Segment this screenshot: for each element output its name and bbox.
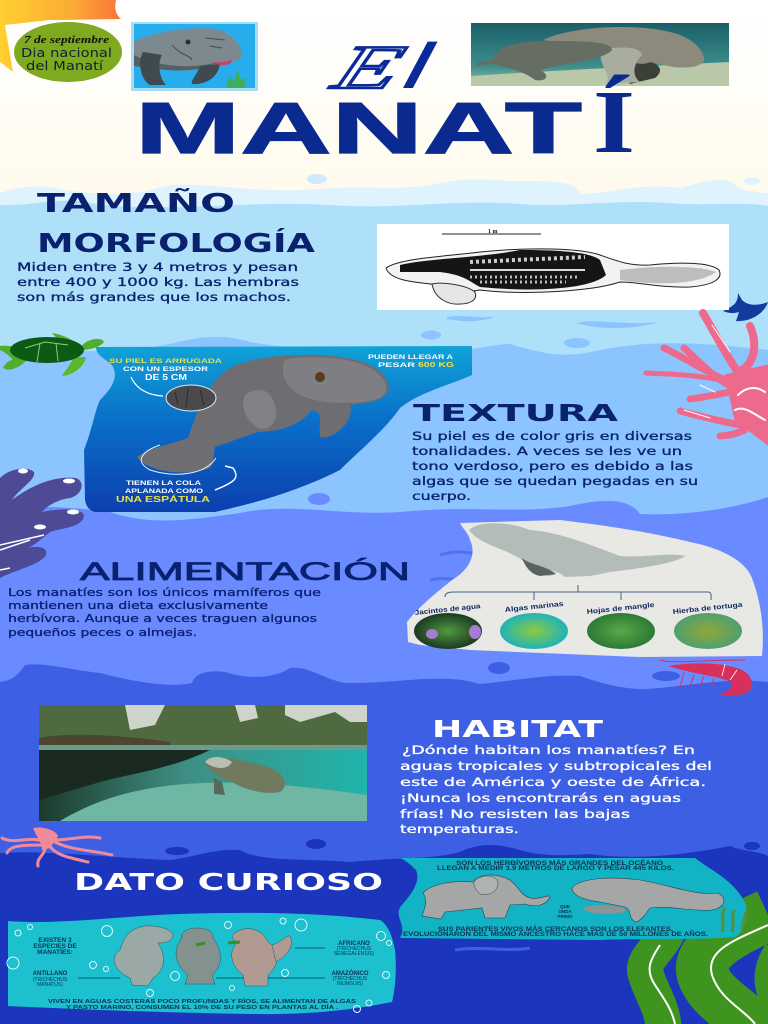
panel: largest herbivores: LLEGAN A MEDIR 3.9 METROS DE LARGO Y PESAR 445 KILOS. xyxy=(437,866,674,872)
panel: skin infographic: DE 5 CM xyxy=(145,373,187,382)
heading: alimentación: ALIMENTACIÓN xyxy=(80,557,410,586)
panel: diet plants: Hierba de tortuga xyxy=(672,602,743,616)
panel: three species: INUNGUIS) xyxy=(337,981,363,987)
text: habitat: aguas tropicales y subtropicales del xyxy=(400,759,712,773)
panel: largest herbivores xyxy=(399,858,747,940)
panel: skin infographic: 600 KG xyxy=(418,360,454,369)
title: El: E xyxy=(323,33,414,101)
text: size: Miden entre 3 y 4 metros y pesan xyxy=(17,260,298,274)
text: texture: tonalidades. A veces se les ve un xyxy=(412,444,682,458)
panel: largest herbivores: EVOLUCIONARON DEL MISMO ANCESTRO HACE MÁS DE 50 MILLONES DE AÑOS. xyxy=(403,931,708,938)
icon: whale xyxy=(723,293,768,321)
panel: diet plants: Jacintos de agua xyxy=(414,603,481,617)
heading: textura: TEXTURA xyxy=(413,401,618,427)
text: habitat: este de América y oeste de África. xyxy=(400,774,706,789)
panel: three species: AFRICANO xyxy=(338,941,370,947)
heading: tamaño morfología: MORFOLOGÍA xyxy=(37,227,315,259)
photo: manatee and calf xyxy=(471,23,729,86)
text: habitat: ¡Nunca los encontrarás en aguas xyxy=(400,791,681,805)
text: texture: algas que se quedan pegadas en su xyxy=(412,474,698,488)
three manatee figures xyxy=(114,926,292,986)
panel: diet plants: Algas marinas xyxy=(504,601,564,614)
panel: three species: MANATUS) xyxy=(37,982,63,988)
panel: three species: (TRICHECHUS xyxy=(33,977,68,983)
icon: pink coral xyxy=(646,313,768,445)
panel: three species: AMAZÓNICO xyxy=(332,969,369,977)
title: Manatí: Í xyxy=(593,73,635,172)
panel: diet plants: Hojas de mangle xyxy=(586,602,655,616)
title: El xyxy=(323,31,448,102)
panel: largest herbivores: SON LOS HERBÍVOROS MÁS GRANDES DEL OCÉANO xyxy=(456,859,663,867)
panel: three species: (TRICHECHUS xyxy=(337,946,372,952)
panel: largest herbivores: PRIMO xyxy=(558,914,573,919)
heading: habitat: HABITAT xyxy=(432,717,603,743)
badge: date: 7 de septiembre xyxy=(24,35,109,46)
text: diet: herbívora. Aunque a veces traguen algunos xyxy=(8,613,317,625)
sun corner xyxy=(0,0,121,72)
elephant xyxy=(422,875,550,919)
panel: skin infographic xyxy=(84,346,472,512)
text: texture: cuerpo. xyxy=(412,489,471,503)
badge: date: Dia nacional xyxy=(21,46,112,60)
panel: skin infographic: APLANADA COMO xyxy=(125,489,203,495)
panel: three species: SENEGALENSIS) xyxy=(334,951,374,957)
text: diet: pequeños peces o almejas. xyxy=(8,627,197,639)
seaweed xyxy=(645,915,768,1024)
background: sky xyxy=(0,0,768,230)
panel: three species: Y PASTO MARINO, CONSUMEN EL 10% DE SU PESO EN PLANTAS AL DÍA . xyxy=(66,1003,339,1011)
icon: purple coral xyxy=(0,468,84,578)
text: size: entre 400 y 1000 kg. Las hembras xyxy=(17,275,299,289)
picture: skeleton diagram xyxy=(377,224,729,310)
panel: three species: ANTILLANO xyxy=(33,971,68,977)
panel: largest herbivores: QUE xyxy=(560,904,570,909)
panel: largest herbivores: SUS PARIENTES VIVOS MÁS CERCANOS SON LOS ELEFANTES, xyxy=(438,926,673,933)
text: size xyxy=(17,260,299,304)
text: diet: mantienen una dieta exclusivamente xyxy=(8,600,268,612)
heading: tamaño morfología xyxy=(37,187,315,259)
badge: date xyxy=(5,20,126,89)
manatee illustration xyxy=(131,355,389,490)
panel: skin infographic: PESAR xyxy=(378,362,415,369)
icon: shrimp xyxy=(660,660,752,696)
decorative bubbles and ripples xyxy=(165,174,760,950)
text: habitat: ¿Dónde habitan los manatíes? En xyxy=(402,743,695,757)
panel: three species: VIVEN EN AGUAS COSTERAS POCO PROFUNDAS Y RÍOS, SE ALIMENTAN DE ALGAS xyxy=(48,997,356,1005)
text: texture: Su piel es de color gris en diversas xyxy=(412,429,692,443)
panel: three species: (TRICHECHUS xyxy=(333,976,368,982)
picture: cartoon manatee xyxy=(131,22,258,91)
title: Manatí: MANAT xyxy=(135,89,582,169)
badge: date: del Manatí xyxy=(26,59,104,73)
panel: three species: MANATÍES: xyxy=(37,947,73,956)
text: habitat xyxy=(400,743,712,836)
picture: skeleton diagram: 1 m xyxy=(488,229,498,235)
heading: tamaño morfología: TAMAÑO xyxy=(37,187,235,219)
panel: three species: ESPECIES DE xyxy=(33,943,77,950)
title: El: l xyxy=(391,31,448,102)
panel: skin infographic: PUEDEN LLEGAR A xyxy=(368,354,453,361)
text: diet: Los manatíes son los únicos mamíferos que xyxy=(8,587,321,599)
icon: turtle xyxy=(0,333,104,376)
icon: octopus xyxy=(2,827,112,866)
text: diet xyxy=(8,587,321,639)
panel: skin infographic: SU PIEL ES ARRUGADA xyxy=(109,358,222,365)
title: Manatí xyxy=(135,73,635,172)
panel: three species xyxy=(7,913,396,1014)
panel: largest herbivores: ONDA xyxy=(558,909,572,914)
grey manatee xyxy=(469,523,686,577)
heading: dato curioso: DATO CURIOSO xyxy=(74,870,383,896)
text: texture xyxy=(412,429,698,503)
text: size: son más grandes que los machos. xyxy=(17,290,291,304)
panel: skin infographic: UNA ESPÁTULA xyxy=(116,494,210,504)
text: habitat: temperaturas. xyxy=(400,822,519,836)
panel: diet plants xyxy=(407,520,763,657)
panel: skin infographic: CON UN ESPESOR xyxy=(123,366,208,373)
photo: habitat xyxy=(39,705,367,821)
text: texture: tono verdoso, pero es debido a las xyxy=(412,459,693,473)
panel: skin infographic: TIENEN LA COLA xyxy=(126,481,202,487)
panel: three species: EXISTEN 3 xyxy=(38,937,72,944)
text: habitat: frías! No resisten las bajas xyxy=(400,807,630,821)
blue-grey manatee xyxy=(582,905,625,914)
